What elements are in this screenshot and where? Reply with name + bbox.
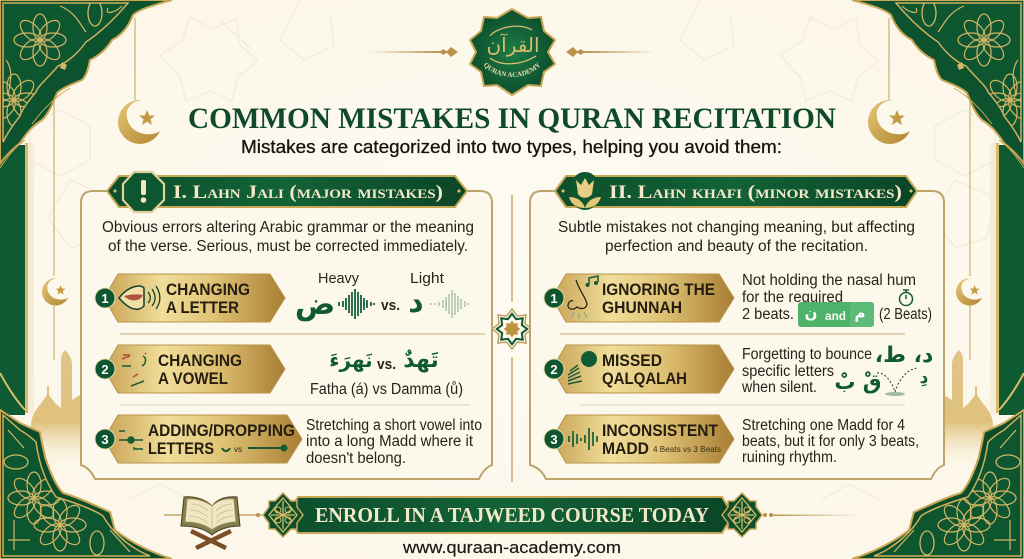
- intro text: perfection and beauty of the recitation.: [605, 238, 868, 255]
- section header ribbon: [107, 172, 467, 212]
- fatha vs damma comparison: vs.: [377, 356, 396, 373]
- ghunnah explanation: [742, 272, 932, 327]
- icon: large crescent left: [118, 100, 160, 144]
- item 3: adding/dropping letters: LETTERS: [148, 439, 214, 458]
- fatha vs damma comparison: تَهدٌ: [403, 348, 439, 373]
- corner: top right: [852, 0, 1024, 168]
- section header ribbon: II. Lahn khafi (minor mistakes): [609, 182, 902, 203]
- item 1: changing a letter: A LETTER: [166, 298, 239, 317]
- icon: connector: [119, 431, 143, 449]
- icon: small crescent left: [42, 278, 68, 306]
- qalqalah explanation: when silent.: [741, 379, 817, 396]
- ghunnah explanation: Not holding the nasal hum: [742, 272, 916, 289]
- panel: lahn jali: [81, 172, 492, 479]
- item 1: changing a letter: 1: [101, 291, 109, 306]
- icon: stopwatch: [900, 290, 912, 306]
- intro text: Obvious errors altering Arabic grammar or the meaning: [102, 219, 474, 236]
- fatha vs damma comparison: [310, 348, 463, 398]
- noon and meem chip: ن: [805, 304, 817, 322]
- madd explanation: doesn't belong.: [306, 450, 406, 467]
- icon: nose and note: [568, 276, 598, 319]
- qalqalah explanation: Forgetting to bounce: [742, 346, 872, 363]
- heavy vs light comparison: Heavy: [318, 270, 359, 287]
- hanging lines: [54, 18, 970, 360]
- icon: short vs long: vs: [234, 445, 242, 454]
- mosque silhouette left: [30, 350, 80, 470]
- heavy vs light comparison: د: [408, 285, 424, 320]
- logo badge: القرآن: [486, 32, 540, 57]
- item 1: ignoring the ghunnah: IGNORING THE: [602, 280, 715, 299]
- intro text: [558, 219, 915, 255]
- logo badge: [468, 8, 556, 96]
- icon: mouth: [119, 286, 160, 309]
- item 1: ignoring the ghunnah: [544, 274, 734, 322]
- intro text: of the verse. Serious, must be corrected immediately.: [108, 238, 468, 255]
- item 3: inconsistent madd: 3: [550, 432, 558, 447]
- qalqalah explanation: [741, 343, 933, 396]
- panel: lahn khafi: [530, 172, 944, 479]
- item 2: missed qalqalah: 2: [550, 362, 558, 377]
- item 2: changing a vowel: CHANGING: [158, 351, 242, 370]
- icon: open quran on stand: [164, 497, 262, 548]
- madd explanation: [306, 417, 482, 467]
- item 1: changing a letter: [95, 274, 285, 322]
- icon: large crescent right: [868, 100, 910, 144]
- section header ribbon: I. Lahn Jali (major mistakes): [173, 182, 443, 203]
- icon: bouncing ball on spring: [568, 351, 597, 384]
- panel frame: [81, 191, 492, 479]
- corner: bottom right: [852, 410, 1024, 559]
- corner: top left: [0, 0, 172, 168]
- left border strip: [0, 143, 34, 415]
- ornament line under banner right: [763, 513, 860, 517]
- ornament line right: [566, 47, 656, 57]
- icon: waveform: [569, 428, 597, 450]
- item 3: inconsistent madd: INCONSISTENT: [602, 421, 719, 440]
- item 2: changing a vowel: A VOWEL: [158, 369, 228, 388]
- noon and meem chip: م: [854, 304, 866, 322]
- icon: short vs long: [222, 444, 288, 454]
- qalqalah explanation: specific letters: [742, 363, 834, 380]
- logo badge: QURAN ACADEMY: [484, 62, 540, 77]
- right border strip: [990, 143, 1024, 415]
- cta banner: [263, 493, 762, 537]
- item 3: adding/dropping letters: 3: [101, 432, 109, 447]
- madd explanation: Stretching a short vowel into: [306, 417, 482, 434]
- madd rhythm explanation: beats, but it for only 3 beats,: [742, 433, 919, 450]
- center divider: [470, 195, 552, 482]
- item 2: missed qalqalah: QALQALAH: [602, 369, 687, 388]
- madd rhythm explanation: [742, 417, 919, 466]
- mosque silhouette right: [944, 350, 994, 470]
- heavy vs light comparison: Light: [410, 270, 445, 287]
- item 2: changing a vowel: 2: [101, 362, 109, 377]
- item 3: inconsistent madd: 4 Beats vs 3 Beats: [653, 444, 721, 454]
- madd rhythm explanation: ruining rhythm.: [742, 449, 837, 466]
- madd rhythm explanation: Stretching one Madd for 4: [742, 417, 905, 434]
- intro text: [102, 219, 474, 255]
- panel frame: [530, 191, 944, 479]
- fatha vs damma comparison: نَهرَءَ: [329, 348, 373, 372]
- item 2: missed qalqalah: [544, 345, 734, 393]
- ghunnah explanation: 2 beats.: [742, 306, 794, 323]
- divider lines: [560, 334, 905, 405]
- madd explanation: into a long Madd where it: [306, 433, 474, 450]
- arabic qalqalah letters: دِ: [920, 368, 929, 388]
- item 1: changing a letter: CHANGING: [166, 280, 250, 299]
- intro text: Subtle mistakes not changing meaning, but affecting: [558, 219, 915, 236]
- ornament line left: [368, 47, 458, 57]
- section header ribbon: [555, 172, 917, 210]
- item 3: inconsistent madd: [544, 415, 734, 463]
- item 1: ignoring the ghunnah: 1: [550, 291, 558, 306]
- arabic qalqalah letters: د، ط،: [875, 343, 933, 368]
- subtitle: Mistakes are categorized into two types, helping you avoid them:: [241, 137, 782, 157]
- icon: small crescent right: [956, 278, 982, 306]
- heavy vs light comparison: ض: [295, 287, 335, 322]
- item 1: ignoring the ghunnah: GHUNNAH: [602, 298, 682, 317]
- cta banner: ENROLL IN A TAJWEED COURSE TODAY: [315, 503, 709, 527]
- item 2: missed qalqalah: MISSED: [602, 351, 662, 370]
- item 3: inconsistent madd: MADD: [602, 439, 649, 458]
- fatha vs damma comparison: Fatha (á) vs Damma (ů): [310, 381, 463, 398]
- corner: bottom left: [0, 410, 172, 559]
- website url: www.quraan-academy.com: [402, 538, 621, 557]
- ghunnah explanation: (2 Beats): [879, 306, 932, 323]
- item 3: adding/dropping letters: ADDING/DROPPING: [148, 421, 295, 440]
- title: COMMON MISTAKES IN QURAN RECITATION: [188, 102, 836, 135]
- arabic qalqalah letters: [834, 343, 933, 396]
- icon: vowel marks: [122, 353, 146, 386]
- noon and meem chip: [798, 302, 874, 327]
- item 2: changing a vowel: [95, 345, 285, 393]
- heavy vs light comparison: [295, 270, 468, 322]
- heavy vs light comparison: vs.: [381, 297, 400, 314]
- arabic qalqalah letters: قْ بْ: [834, 370, 882, 394]
- ghunnah explanation: for the required: [742, 289, 843, 306]
- item 3: adding/dropping letters: [95, 415, 302, 463]
- noon and meem chip: and: [825, 309, 846, 323]
- divider lines: [120, 334, 485, 405]
